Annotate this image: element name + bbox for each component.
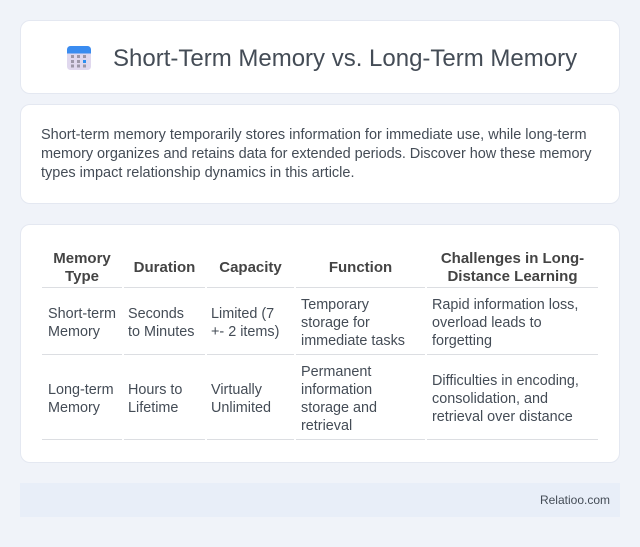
header row: Challenges in Long-	[441, 250, 584, 267]
row: short-term memory: forgetting	[432, 333, 492, 349]
row: short-term memory: Limited (7	[211, 306, 274, 322]
row: long-term memory: Hours to	[128, 382, 182, 398]
row: short-term memory: immediate tasks	[301, 333, 405, 349]
row: long-term memory: information	[301, 382, 372, 398]
header row: Memory	[53, 250, 111, 267]
row: short-term memory: Short-term	[48, 306, 116, 322]
row: short-term memory: Rapid information loss,	[432, 297, 578, 313]
intro text: Short-term memory temporarily stores information for immediate use, while long-term	[41, 127, 587, 143]
row: short-term memory	[48, 297, 578, 349]
footer	[20, 483, 620, 517]
row: long-term memory: consolidation, and	[432, 391, 548, 407]
row: long-term memory: Virtually	[211, 382, 262, 398]
header row: Type	[65, 268, 99, 285]
intro text: types impact relationship dynamics in this article.	[41, 165, 354, 181]
row: short-term memory: Memory	[48, 324, 100, 340]
panel: title card	[20, 20, 620, 94]
row: short-term memory: overload leads to	[432, 315, 542, 331]
row: long-term memory	[48, 364, 579, 434]
header row: Function	[329, 259, 392, 276]
row: long-term memory: retrieval over distance	[432, 409, 573, 425]
header row	[53, 250, 584, 285]
intro text: memory organizes and retains data for extended periods. Discover how these memory	[41, 146, 591, 162]
header row: Distance Learning	[447, 268, 578, 285]
panel: comparison table	[20, 224, 620, 463]
row: long-term memory: storage and	[301, 400, 377, 416]
header row: Capacity	[219, 259, 282, 276]
panel: intro	[20, 104, 620, 204]
header row: Duration	[134, 259, 195, 276]
row: short-term memory: Temporary	[301, 297, 369, 313]
row: short-term memory: Seconds	[128, 306, 184, 322]
row: long-term memory: retrieval	[301, 418, 352, 434]
row: long-term memory: Unlimited	[211, 400, 271, 416]
row: long-term memory: Long-term	[48, 382, 114, 398]
row: short-term memory: +- 2 items)	[211, 324, 279, 340]
icon: calendar	[67, 46, 91, 70]
intro text	[41, 127, 592, 181]
row: long-term memory: Permanent	[301, 364, 371, 380]
row: short-term memory: storage for	[301, 315, 370, 331]
row: long-term memory: Lifetime	[128, 400, 178, 416]
row: long-term memory: Memory	[48, 400, 100, 416]
footer credit: Relatioo.com	[540, 493, 610, 507]
row: long-term memory: Difficulties in encoding,	[432, 373, 579, 389]
row: short-term memory: to Minutes	[128, 324, 194, 340]
title: Short-Term Memory vs. Long-Term Memory	[113, 45, 577, 72]
table	[42, 250, 598, 440]
